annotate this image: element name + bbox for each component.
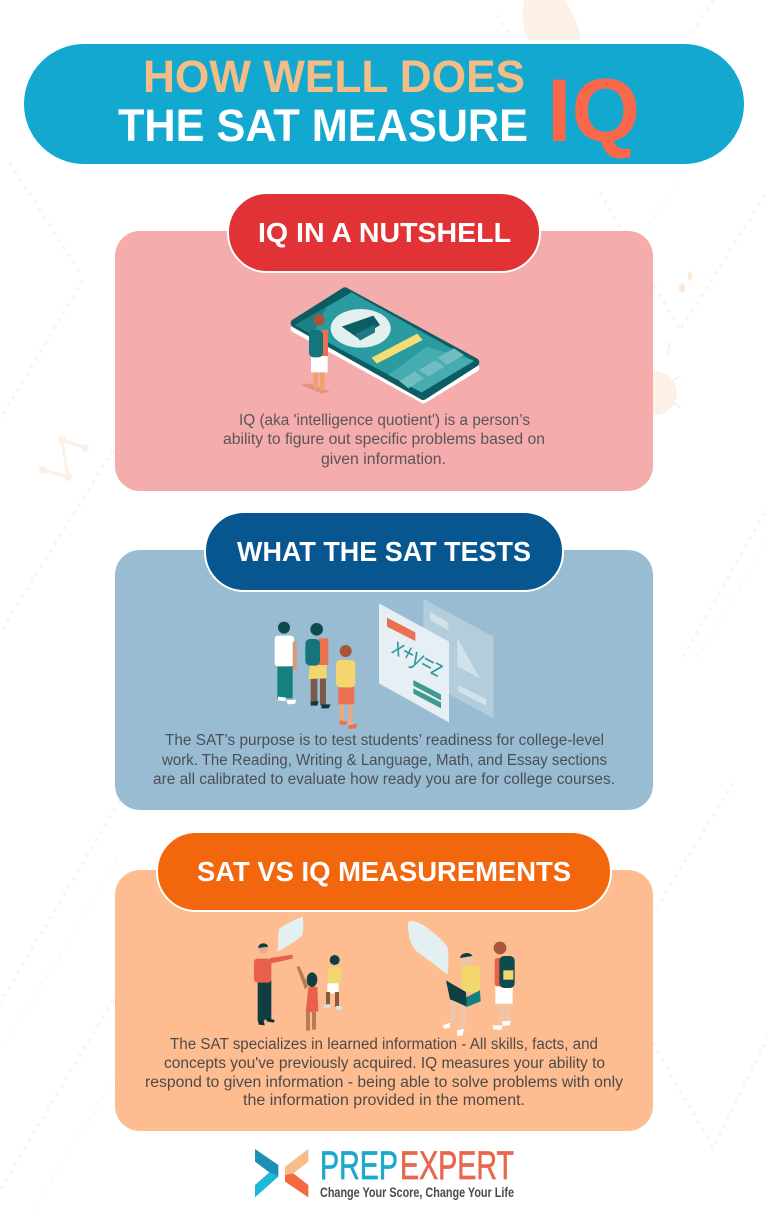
logo: Prep Expert xyxy=(255,1144,514,1200)
student 2 xyxy=(305,623,331,708)
panel: IQ in a nutshell xyxy=(115,193,653,491)
icon: students facing test sheets xyxy=(275,599,493,729)
text block: IQ definition: IQ (aka 'intelligence quotient') is a person’s xyxy=(239,412,530,429)
icon: teacher with students and speech bubble xyxy=(254,917,342,1031)
text block: SAT purpose: work. The Reading, Writing & Language, Math, and Essay sections xyxy=(161,752,607,769)
heading: SAT vs IQ measurements: SAT VS IQ MEASUREMENTS xyxy=(197,856,571,887)
student 1 xyxy=(275,622,297,704)
title: first line: HOW WELL DOES xyxy=(143,51,525,102)
title banner xyxy=(24,44,744,164)
student 3 xyxy=(336,645,357,729)
panel: what the SAT tests xyxy=(115,512,653,810)
text block: IQ definition: ability to figure out specific problems based on xyxy=(223,431,545,448)
heading: what the SAT tests: WHAT THE SAT TESTS xyxy=(237,536,531,567)
text block: SAT purpose xyxy=(153,732,615,788)
text block: SAT vs IQ explanation: The SAT specializes in learned information - All skills, facts, and xyxy=(170,1036,598,1053)
heading: what the SAT tests xyxy=(205,512,563,591)
heading: IQ in a nutshell: IQ IN A NUTSHELL xyxy=(258,217,511,248)
panel: SAT vs IQ measurements xyxy=(115,832,653,1131)
logo wordmark: PREP xyxy=(320,1144,398,1188)
text block: SAT vs IQ explanation xyxy=(145,1036,623,1109)
logo tagline: Change Your Score, Change Your Life xyxy=(320,1185,514,1200)
text block: SAT vs IQ explanation: the information provided in the moment. xyxy=(243,1092,525,1109)
text block: SAT vs IQ explanation: concepts you've previously acquired. IQ measures your ability to xyxy=(164,1055,605,1072)
title: second line: THE SAT MEASURE xyxy=(118,100,528,151)
text block: SAT vs IQ explanation: respond to given information - being able to solve problems with only xyxy=(145,1074,623,1091)
heading: SAT vs IQ measurements xyxy=(157,832,611,911)
text block: IQ definition: given information. xyxy=(321,451,446,468)
text block: IQ definition xyxy=(223,412,545,468)
text block: SAT purpose: are all calibrated to evaluate how ready you are for college courses. xyxy=(153,771,615,788)
icon: students with laptop and speech bubble xyxy=(408,921,515,1036)
logo: Prep Expert: EXPERT xyxy=(400,1144,514,1188)
heading: IQ in a nutshell xyxy=(228,193,540,272)
title: IQ: IQ xyxy=(547,60,640,160)
icon: logo chevrons xyxy=(255,1149,308,1197)
icon: phone with graduation cap and student xyxy=(295,292,475,399)
text block: SAT purpose: The SAT’s purpose is to test students’ readiness for college-level xyxy=(165,732,604,749)
icon: students facing test sheets: x+y=z xyxy=(388,634,448,683)
